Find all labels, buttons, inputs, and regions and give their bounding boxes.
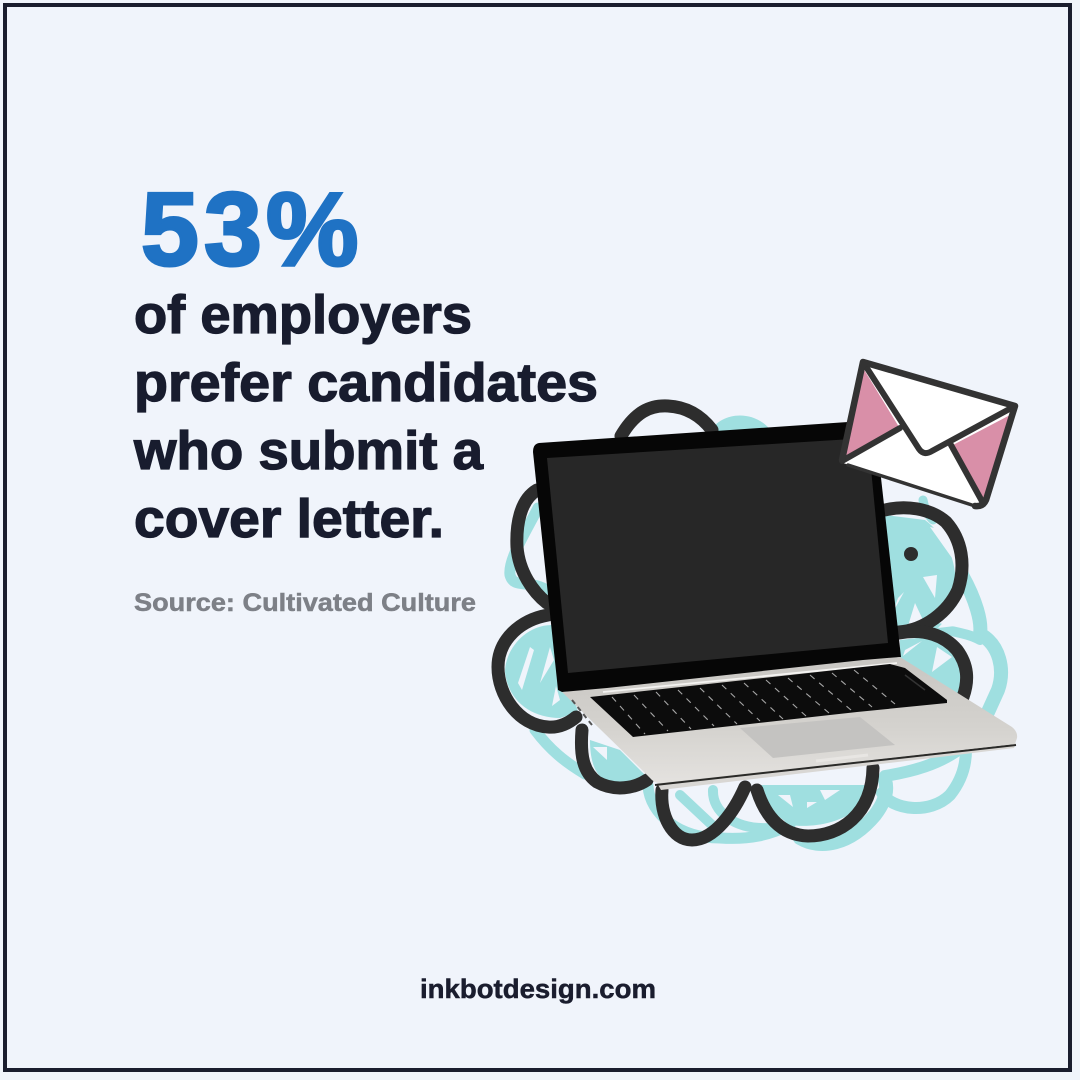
headline text bbox=[133, 285, 598, 549]
headline text: who submit a bbox=[133, 421, 484, 481]
laptop base bbox=[562, 657, 1017, 783]
headline text: of employers bbox=[134, 285, 472, 345]
envelope body bbox=[840, 360, 1017, 507]
website footer: inkbotdesign.com bbox=[420, 974, 656, 1004]
envelope right pink side bbox=[951, 414, 1012, 500]
laptop trackpad bbox=[740, 717, 895, 758]
laptop bbox=[533, 422, 1017, 790]
laptop keyboard bbox=[590, 664, 947, 737]
dark outline petals bbox=[498, 406, 967, 840]
scribble gaps bbox=[518, 527, 955, 808]
envelope bottom edge bbox=[848, 465, 975, 506]
illustration: laptop and envelope over scribble bbox=[498, 360, 1017, 844]
statistic: 53%: 53% bbox=[141, 172, 358, 288]
dark dot bbox=[904, 547, 918, 561]
envelope left pink side bbox=[842, 368, 899, 458]
laptop base shadow line bbox=[655, 745, 1016, 785]
laptop lid bezel bbox=[533, 422, 901, 692]
laptop base underside bbox=[657, 743, 1016, 790]
laptop screen bbox=[547, 438, 888, 673]
source line: Source: Cultivated Culture bbox=[134, 589, 476, 617]
envelope top and side outline bbox=[842, 362, 1015, 506]
headline text: cover letter. bbox=[134, 489, 444, 549]
laptop front notch bbox=[816, 755, 868, 761]
envelope flap lines bbox=[842, 362, 1015, 503]
laptop ports bbox=[572, 700, 592, 725]
headline text: prefer candidates bbox=[134, 353, 598, 413]
icon: envelope bbox=[840, 360, 1017, 507]
teal scribble bbox=[505, 415, 1001, 844]
laptop hinge highlight bbox=[603, 663, 897, 692]
